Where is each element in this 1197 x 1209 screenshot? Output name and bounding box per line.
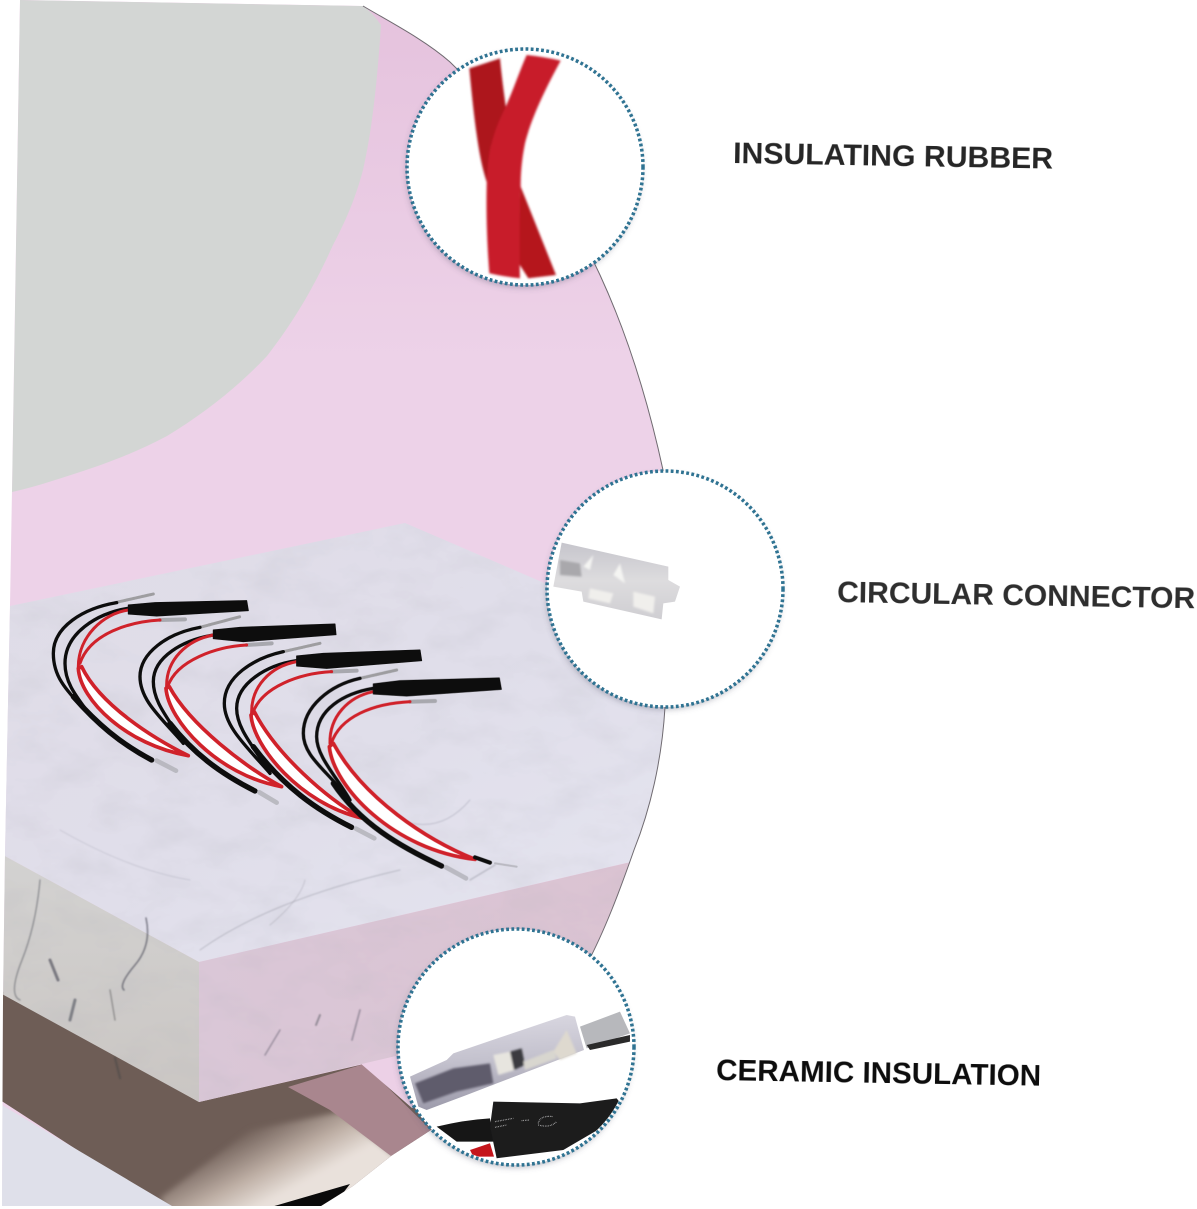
lit cream floor: [160, 1112, 400, 1209]
marble slab right face: [199, 860, 640, 1102]
marble slab left face: [0, 855, 199, 1102]
under-slab shadow: [0, 990, 440, 1209]
marble veins: [14, 800, 495, 1078]
dotted ring: [407, 49, 643, 285]
icon: red twisted wires: [469, 55, 561, 278]
label: ceramic insulation: CERAMIC INSULATION: [716, 1054, 1041, 1093]
lower marble slab: [0, 1104, 172, 1206]
panel: product scene: [0, 0, 700, 1209]
black floor corner: [274, 1184, 350, 1206]
marble slab top surface: [3, 523, 700, 962]
icon: clear bullet connector: [553, 543, 680, 619]
dotted ring: [547, 471, 783, 707]
marble grain texture: [0, 520, 700, 1120]
callout circle: insulating rubber: [407, 49, 643, 285]
callout circle: circular connector: [547, 471, 783, 707]
circle base: [547, 471, 783, 707]
wire harness set 4: [303, 670, 517, 878]
label: circular connector: CIRCULAR CONNECTOR: [837, 576, 1196, 615]
label: insulating rubber: INSULATING RUBBER: [733, 137, 1054, 176]
gray arc backdrop: [12, 0, 381, 492]
dotted ring: [398, 929, 634, 1165]
circle base: [407, 49, 643, 285]
icon: insulated terminal and black sleeve: [410, 1012, 630, 1158]
wire harness set 2: [140, 617, 336, 803]
wire harness set 1: [53, 594, 248, 771]
pink backdrop: [0, 0, 700, 1209]
mauve wall: [288, 1064, 431, 1156]
pink wall sliver: [362, 1064, 414, 1108]
wire harness set 3: [224, 643, 422, 838]
circle base: [398, 929, 634, 1165]
callout circle: ceramic insulation: [398, 929, 634, 1165]
scene outline: [363, 6, 669, 964]
